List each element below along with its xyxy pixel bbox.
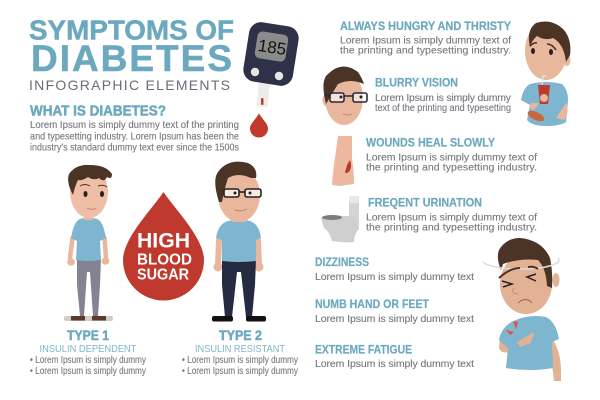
text block: type 1: • Lorem Ipsum is simply dummy bbox=[30, 355, 146, 366]
symptom: always hungry and thirsty: ALWAYS HUNGRY AND THRISTY bbox=[340, 21, 511, 33]
symptom: blurry vision: Lorem Ipsum is simply dummy bbox=[375, 92, 512, 104]
symptom: numb hand or feet bbox=[315, 299, 474, 325]
title: SYMPTOMS OF bbox=[29, 14, 234, 46]
callout: high blood sugar drop: BLOOD bbox=[137, 252, 192, 268]
symptom: wounds heal slowly bbox=[366, 138, 537, 174]
symptom: frequent urination: Lorem Ipsum is simply dummy text of bbox=[366, 212, 537, 224]
icon: blood drop small bbox=[250, 114, 268, 138]
symptom: frequent urination: FREQENT URINATION bbox=[368, 198, 482, 210]
text block: diabetes description: Lorem Ipsum is simply dummy text of the printing bbox=[30, 119, 239, 131]
title: INFOGRAPHIC ELEMENTS bbox=[29, 77, 230, 93]
symptom: always hungry and thirsty bbox=[340, 21, 511, 57]
symptom: dizziness bbox=[315, 257, 474, 283]
icon: glucose meter: 185 bbox=[257, 36, 288, 59]
symptom: dizziness: DIZZINESS bbox=[315, 257, 369, 269]
text block: type 2: • Lorem Ipsum is simply dummy bbox=[182, 366, 298, 377]
symptom: always hungry and thirsty: Lorem Ipsum is simply dummy text of bbox=[340, 34, 511, 46]
symptom: always hungry and thirsty: the printing and typesetting industry. bbox=[340, 45, 511, 57]
icon: wounded foot bbox=[332, 136, 354, 186]
callout: high blood sugar drop: HIGH bbox=[137, 230, 190, 252]
figure: type 1 person bbox=[64, 165, 113, 321]
symptom: frequent urination: the printing and typesetting industry. bbox=[366, 222, 537, 234]
text block: type 2 bbox=[182, 328, 298, 377]
callout: high blood sugar drop: SUGAR bbox=[137, 266, 189, 284]
symptom: numb hand or feet: Lorem Ipsum is simply dummy text bbox=[315, 313, 474, 325]
symptom: extreme fatigue bbox=[315, 344, 474, 370]
text block: type 1: TYPE 1 bbox=[67, 328, 109, 343]
figure: type 2 person bbox=[212, 162, 266, 322]
symptom: wounds heal slowly: WOUNDS HEAL SLOWLY bbox=[366, 138, 495, 150]
figure: man with drink and sandwich bbox=[521, 22, 570, 126]
text block: diabetes description: industry's standard dummy text ever since the 1500s bbox=[30, 142, 239, 154]
figure: head with glasses bbox=[322, 66, 367, 125]
symptom: dizziness: Lorem Ipsum is simply dummy text bbox=[315, 271, 474, 283]
title bbox=[29, 14, 234, 93]
symptom: extreme fatigue: Lorem Ipsum is simply dummy text bbox=[315, 358, 474, 370]
text block: type 2: INSULIN RESISTANT bbox=[195, 343, 286, 355]
symptom: blurry vision: text of the printing and typesetting bbox=[375, 102, 511, 114]
text block: type 2: • Lorem Ipsum is simply dummy bbox=[182, 355, 298, 366]
symptom: numb hand or feet: NUMB HAND OR FEET bbox=[315, 299, 429, 311]
symptom: wounds heal slowly: Lorem Ipsum is simply dummy text of bbox=[366, 152, 537, 164]
text block: type 1 bbox=[30, 328, 146, 377]
text block: diabetes description: and typesetting industry. Lorem Ipsum has been the bbox=[30, 130, 239, 142]
callout: high blood sugar drop bbox=[123, 192, 204, 300]
symptom: frequent urination bbox=[366, 198, 537, 234]
text block: type 1: INSULIN DEPENDENT bbox=[40, 343, 137, 355]
text block: type 1: • Lorem Ipsum is simply dummy bbox=[30, 366, 146, 377]
text block: diabetes description bbox=[30, 119, 239, 154]
symptom: blurry vision bbox=[375, 78, 512, 114]
symptom: wounds heal slowly: the printing and typesetting industry. bbox=[366, 162, 537, 174]
heading: what is diabetes: WHAT IS DIABETES? bbox=[30, 102, 166, 120]
title: DIABETES bbox=[31, 38, 232, 79]
icon: glucose meter bbox=[242, 20, 300, 108]
symptom: blurry vision: BLURRY VISION bbox=[375, 78, 458, 90]
symptom: extreme fatigue: EXTREME FATIGUE bbox=[315, 344, 412, 356]
figure: dizzy man holding chest bbox=[483, 238, 561, 381]
icon: toilet bbox=[321, 196, 359, 242]
text block: type 2: TYPE 2 bbox=[219, 328, 262, 343]
